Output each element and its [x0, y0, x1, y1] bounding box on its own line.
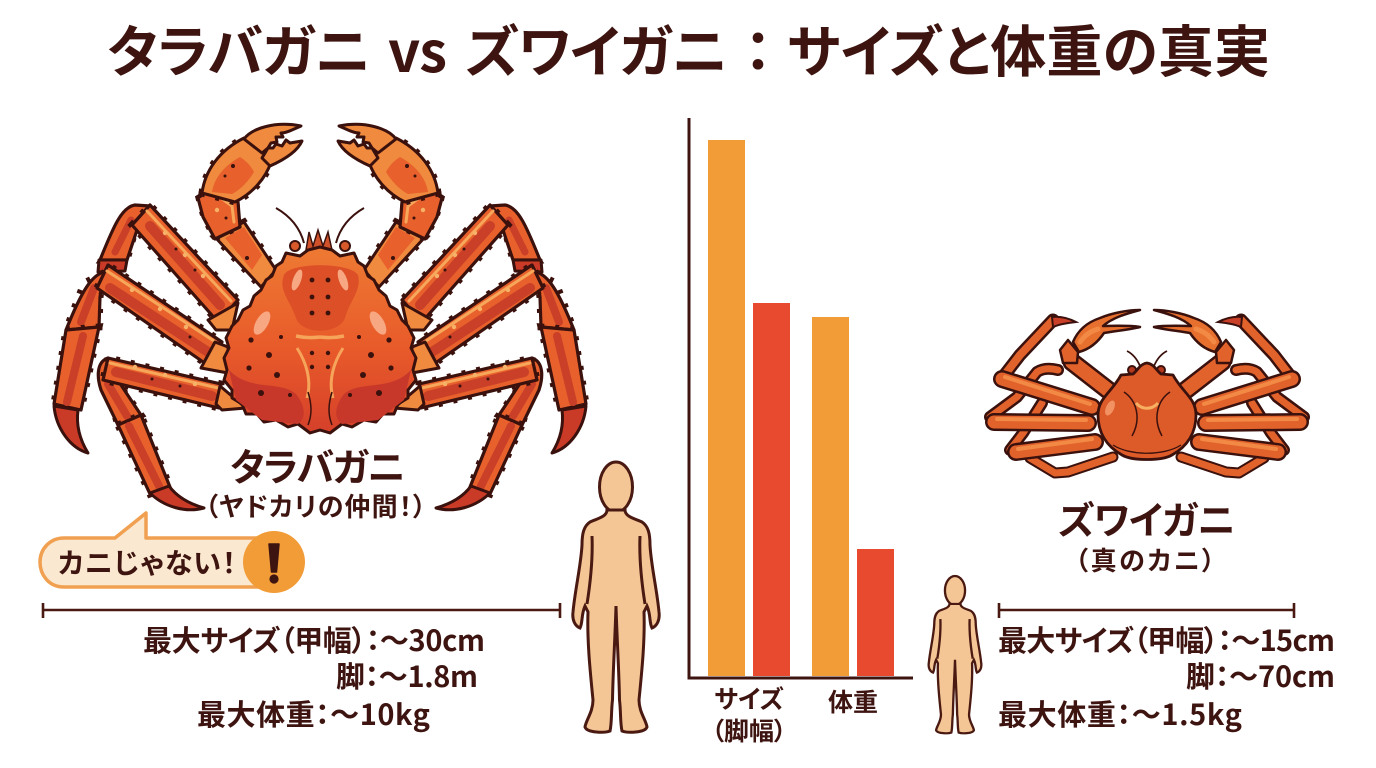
stats: king crab: 脚：～1.8m: [336, 654, 478, 696]
icon: small human silhouette: [929, 576, 981, 733]
snow crab shell details: [1103, 392, 1181, 453]
king crab gastric region: [282, 265, 359, 331]
label: king crab name: タラバガニ: [230, 437, 405, 492]
snow crab carapace: [1098, 363, 1196, 460]
stats: snow crab: 最大体重：～1.5kg: [998, 692, 1242, 734]
icon: exclamation badge: [243, 531, 305, 593]
axis label: weight: 体重: [828, 683, 878, 719]
bar: snow crab size: [753, 303, 790, 676]
dimension line: snow crab: [999, 603, 1294, 618]
king crab left limbs: [54, 124, 302, 510]
dimension line: king crab: [43, 603, 560, 618]
title: [107, 8, 1270, 89]
title: ：: [744, 8, 772, 89]
bar: king crab size: [708, 140, 745, 676]
title: vs: [388, 8, 447, 89]
king crab antennae and eyes: [276, 208, 364, 251]
bar: king crab weight: [812, 317, 849, 676]
king crab shell details left: [229, 268, 320, 425]
icon: large human silhouette: [573, 462, 659, 732]
title: ズワイガニ: [465, 8, 727, 89]
stats: snow crab: [998, 618, 1335, 734]
label: snow crab note: （真のカニ）: [1075, 541, 1215, 578]
stats: snow crab: 脚：～70cm: [1186, 654, 1335, 696]
label: king crab note: （ヤドカリの仲間！）: [205, 487, 426, 524]
king crab shell details right: [320, 268, 411, 425]
title: タラバガニ: [107, 8, 370, 89]
stats: king crab: 最大サイズ（甲幅）：～30cm: [143, 618, 485, 660]
icon: king crab illustration: [54, 124, 586, 510]
axis label: size: サイズ: [714, 680, 784, 716]
snow crab right limbs: [1154, 310, 1304, 473]
snow crab left limbs: [990, 310, 1140, 473]
chart axes: [689, 118, 913, 678]
bar: snow crab weight: [857, 549, 894, 676]
callout bubble: [40, 513, 270, 587]
stats: snow crab: 最大サイズ（甲幅）：～15cm: [998, 618, 1335, 660]
stats: king crab: 最大体重：～10kg: [197, 692, 430, 734]
bar chart: [689, 118, 913, 748]
icon: snow crab illustration: [990, 310, 1304, 473]
label: snow crab name: ズワイガニ: [1058, 490, 1235, 545]
callout: not a crab: [40, 513, 305, 593]
king crab right limbs: [338, 124, 586, 510]
king crab carapace: [224, 247, 416, 433]
callout text: カニじゃない！: [58, 542, 236, 582]
stats: king crab: [143, 618, 485, 734]
title: サイズと体重の真実: [787, 8, 1270, 89]
snow crab antennae and eyes: [1127, 351, 1167, 374]
axis label: leg span: （脚幅）: [711, 712, 787, 748]
